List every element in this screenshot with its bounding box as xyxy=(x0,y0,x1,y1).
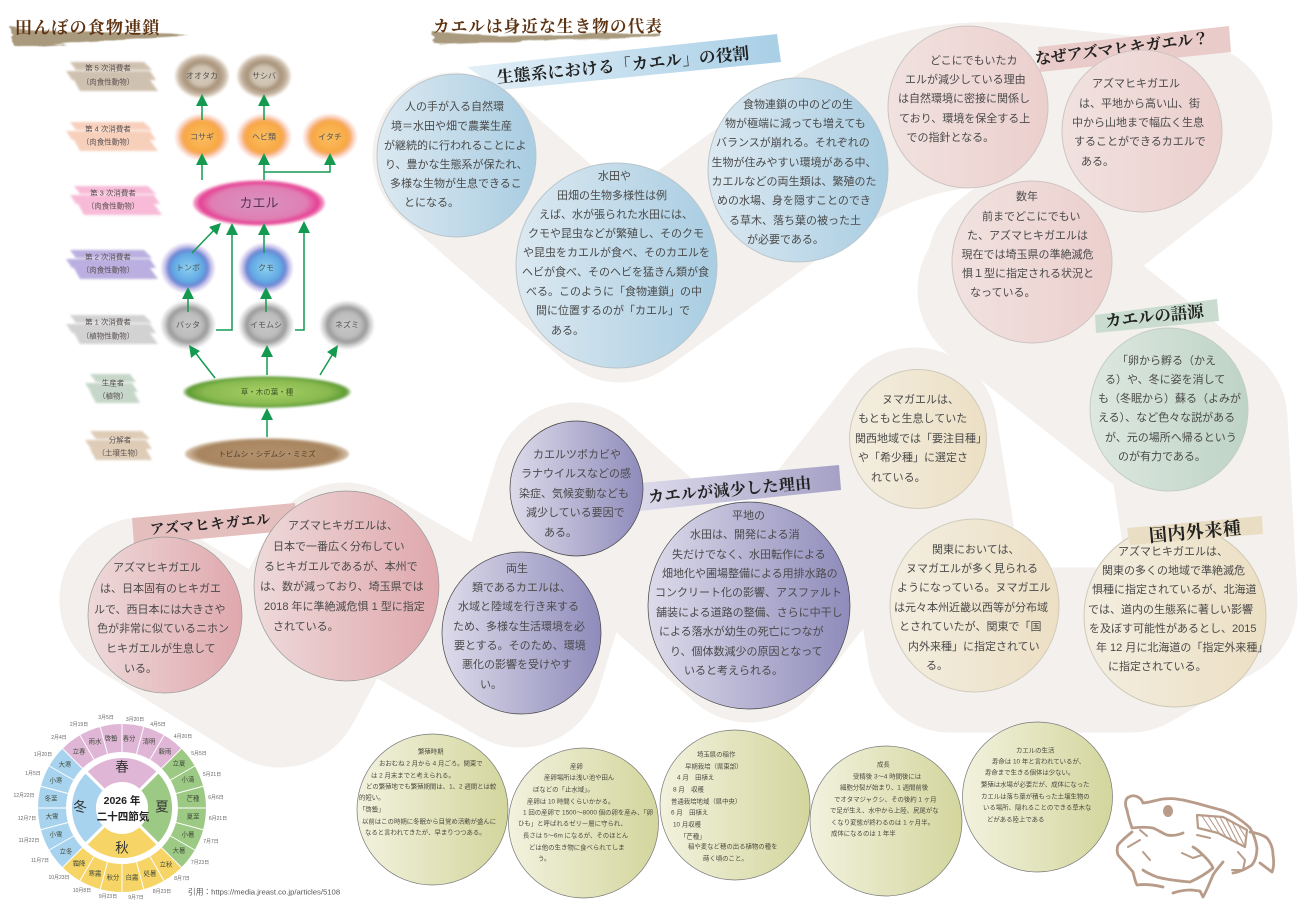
circle: growth: くなり変態が終わるのは 1 ヶ月半。 xyxy=(831,818,934,826)
circle: breeding season: どの繁殖地でも繁殖期間は、1、2 週間とは較 xyxy=(366,782,497,790)
circle: widely distributed habitat: アズマヒキガエル xyxy=(1092,76,1180,90)
circle: rice paddy biodiversity: 間に位置するのが「カエル」で xyxy=(536,303,690,317)
row label: producer: （植物） xyxy=(98,390,128,400)
food chain diagram xyxy=(66,54,374,470)
solar term dates: 9月7日 xyxy=(128,895,144,901)
circle: growth: 細胞分裂が始まり、1 週間前後 xyxy=(840,782,929,792)
circle: azuma hikigaeru in hokkaido: に指定されている。 xyxy=(1108,659,1207,673)
circle: why frogs are declining: は自然環境に密接に関係し xyxy=(898,91,1030,105)
circle: growth: 成長 xyxy=(877,760,890,768)
seasonal calendar: 24 solar terms xyxy=(13,715,227,901)
circle: most widely distributed xyxy=(254,491,439,681)
circle: growth: で足が生え、水中から上陸、尻尾がな xyxy=(830,806,939,814)
season labels: 夏 xyxy=(155,800,169,814)
circle: rice paddy biodiversity: 田畑の生物多様性は例 xyxy=(557,188,667,202)
circle: breeding season: なると言われてきたが、早まりつつある。 xyxy=(365,828,486,836)
circle: rice farming in saitama: 蒔く頃のこと。 xyxy=(703,854,748,862)
solar term names: 小寒 xyxy=(50,776,63,784)
solar term dates: 8月23日 xyxy=(153,889,171,895)
circle: paddy field changes: コンクリート化の影響、アスファルト xyxy=(655,585,842,599)
row label: decomposer: （土壌生物） xyxy=(98,448,142,458)
solar term dates: 6月6日 xyxy=(208,795,224,801)
solar term names: 立夏 xyxy=(173,758,186,768)
row label: decomposer: 分解者 xyxy=(109,434,132,444)
solar term names: 大雪 xyxy=(46,812,58,820)
circle: most widely distributed: アズマヒキガエルは、 xyxy=(288,518,398,532)
solar term names: 霜降 xyxy=(73,858,86,868)
circle: endemic to japan: ヒキガエルが生息して xyxy=(106,641,216,655)
solar term names: 冬至 xyxy=(45,794,58,802)
solar term names: 春分 xyxy=(123,734,136,742)
solar term dates: 1月5日 xyxy=(25,771,41,777)
solar term dates xyxy=(13,715,227,901)
circle: spawning: う。 xyxy=(538,854,550,862)
solar term names: 清明 xyxy=(143,736,155,746)
node: egret xyxy=(175,114,229,160)
circle: etymology of kaeru xyxy=(1090,328,1248,491)
circle: amphibian habitat: い。 xyxy=(480,679,502,691)
circle: breeding season: 以前はこの時期に冬眠から目覚め活動が盛んに xyxy=(362,816,496,826)
circle: human managed environment: 境＝水田や畑で農業生産 xyxy=(391,118,512,132)
circle: numagaeru in kanto: は元々本州近畿以西等が分布域 xyxy=(894,600,1048,614)
banner: etymology: カエルの語源 xyxy=(1104,298,1206,332)
banner: domestic alien species xyxy=(1127,514,1263,548)
circle: frog life: 寿命は 10 年と言われているが、 xyxy=(992,756,1085,766)
background: flowing beige band xyxy=(142,105,1215,685)
solar term names: 立冬 xyxy=(60,846,73,856)
circle: food chain balance: めの水場、身を隠すことのでき xyxy=(717,193,871,207)
node: sashiba: サシバ xyxy=(252,72,276,80)
circle: endemic to japan xyxy=(88,537,242,693)
season labels: 秋 xyxy=(115,840,129,856)
node: egret: コサギ xyxy=(190,132,214,142)
row label: producer xyxy=(85,374,140,403)
solar term names: 大暑 xyxy=(173,846,185,854)
circle: disease causes: 減少している要因で xyxy=(526,505,625,519)
circle: paddy field changes: 水田は、開発による消 xyxy=(690,527,800,541)
circle: spawning: ひも」と呼ばれるゼリー層に守られ、 xyxy=(518,818,627,828)
circle: disease causes: 染症、気候変動なども xyxy=(519,486,629,500)
circle: disease causes: ある。 xyxy=(544,526,577,539)
node: dragonfly: トンボ xyxy=(176,264,200,272)
banner: role of frogs: 生態系における「カエル」の役割 xyxy=(496,40,750,88)
inner ring gaps xyxy=(87,773,157,843)
circle: why frogs are declining: エルが減少している理由 xyxy=(905,72,1026,86)
circle: most widely distributed: るヒキガエルであるが、本州で xyxy=(264,559,418,573)
circle: saitama endangered status: 惧１型に指定される状況と xyxy=(962,266,1094,280)
circle: numagaeru in kansai: や「希少種」に選定さ xyxy=(858,450,968,464)
row label: fifth consumer: 第 5 次消費者 xyxy=(85,62,131,72)
circle: frog life: カエルの生活 xyxy=(1016,746,1055,754)
circle: why frogs are declining: ており、環境を保全する上 xyxy=(899,111,1030,125)
circle: human managed environment: 人の手が入る自然環 xyxy=(405,99,504,113)
circle: spawning xyxy=(508,748,658,898)
circle: rice farming in saitama: 10 月収穫 xyxy=(673,820,702,828)
solar term names: 寒露 xyxy=(89,868,102,878)
circle: food chain balance: 生物が住みやすい環境がある中、 xyxy=(712,155,876,169)
circle: amphibian habitat: 両生 xyxy=(506,561,528,575)
circle: numagaeru in kanto: 関東においては、 xyxy=(932,543,1019,556)
circle: saitama endangered status: 前までどこにでもい xyxy=(982,209,1080,223)
circle: numagaeru in kansai: れている。 xyxy=(871,471,926,484)
row label: first consumer: 第 1 次消費者 xyxy=(85,316,131,326)
season labels: 冬 xyxy=(73,800,87,814)
row label: fifth consumer: （肉食性動物） xyxy=(82,76,134,86)
circle: amphibian habitat: ため、多様な生活環境を必 xyxy=(453,619,585,633)
circle: food chain balance: カエルなどの両生類は、繁殖のた xyxy=(712,174,876,188)
circle: widely distributed habitat: することができるカエルで xyxy=(1074,134,1206,148)
row label: producer: 生産者 xyxy=(102,378,125,388)
circle: frog life: いる場所、隠れることのできる草木な xyxy=(983,802,1091,812)
node: caterpillar xyxy=(239,301,293,349)
node: mouse xyxy=(320,301,374,349)
row label: decomposer xyxy=(85,431,152,460)
circle: why frogs are declining: での指針となる。 xyxy=(906,130,994,144)
circle: widely distributed habitat: は、平地から高い山、街 xyxy=(1079,96,1200,110)
circle: most widely distributed: 2018 年に準絶滅危惧 1 型に指定 xyxy=(264,599,425,613)
circle: numagaeru in kanto: とされていたが、関東で「国 xyxy=(899,619,1041,633)
circle: azuma hikigaeru in hokkaido: では、道内の生態系に著しい影響 xyxy=(1088,602,1253,616)
circle: etymology of kaeru: 「卵から孵る（かえ xyxy=(1117,353,1216,367)
circle: paddy field changes: 舗装による道路の整備、さらに中干し xyxy=(656,605,843,619)
circle: amphibian habitat: 要とする。そのため、環境 xyxy=(454,639,586,652)
circle: rice farming in saitama xyxy=(660,730,810,880)
circle: breeding season: は 2 月末までと考えられる。 xyxy=(371,770,455,780)
circle: disease causes: ラナウイルスなどの感 xyxy=(521,466,631,480)
solar term dates: 3月5日 xyxy=(98,715,114,721)
circle: rice paddy biodiversity: ある。 xyxy=(551,324,584,337)
node: spider xyxy=(239,243,293,293)
solar term dates: 12月7日 xyxy=(18,816,36,822)
circle: numagaeru in kansai: ヌマガエルは、 xyxy=(882,393,959,406)
circle: paddy field changes: 畑地化や圃場整備による用排水路の xyxy=(662,566,838,580)
circle: saitama endangered status: た、アズマヒキガエルは xyxy=(967,228,1088,242)
circle: spawning: 産卵 xyxy=(570,762,583,770)
circle: most widely distributed: 日本で一番広く分布してい xyxy=(273,539,405,553)
solar term names: 処暑 xyxy=(144,868,156,878)
circle: breeding season: 繁殖時期 xyxy=(418,746,444,756)
circle: etymology of kaeru: が、元の場所へ帰るという xyxy=(1105,430,1237,444)
heading: azuma hikigaeru: アズマヒキガエル xyxy=(149,508,272,539)
node: snakes xyxy=(237,114,291,160)
circle: numagaeru in kanto: る。 xyxy=(926,660,948,672)
row label: first consumer xyxy=(66,315,158,344)
circle: food chain balance: 物が極端に減っても増えても xyxy=(725,116,866,130)
circle: growth: 受精後 3〜4 時間後には xyxy=(853,772,922,780)
banner: azuma hikigaeru xyxy=(132,503,297,545)
solar term dates: 5月5日 xyxy=(191,751,207,757)
title: food chain: 田んぼの食物連鎖 xyxy=(15,14,161,38)
circle: widely distributed habitat: ある。 xyxy=(1081,155,1114,168)
circle: spawning: 1 回の産卵で 1500〜8000 個の卵を産み、「卵 xyxy=(523,808,653,816)
circle: paddy field changes xyxy=(648,502,850,709)
circle: saitama endangered status: 現在では埼玉県の準絶滅危 xyxy=(962,247,1094,261)
circle: rice paddy biodiversity xyxy=(516,163,717,368)
banner: role of frogs xyxy=(467,34,781,90)
solar term dates: 4月5日 xyxy=(150,722,166,728)
node: soil organisms xyxy=(185,438,349,470)
circle: rice farming in saitama: 6 月 田植え xyxy=(671,808,708,816)
circle: rice paddy biodiversity: えば、水が張られた水田には、 xyxy=(539,207,693,221)
row label: fourth consumer: （肉食性動物） xyxy=(82,136,134,146)
solar term dates: 10月23日 xyxy=(48,875,70,881)
circle: breeding season xyxy=(357,734,508,885)
circle: spawning: どは他の生き物に食べられてしま xyxy=(529,842,625,852)
node: grasshopper: バッタ xyxy=(176,320,200,330)
circle: amphibian habitat xyxy=(442,552,601,714)
circle: food chain balance: が必要である。 xyxy=(747,232,824,246)
circle: rice farming in saitama: 8 月 収穫 xyxy=(673,784,705,794)
circle: numagaeru in kanto: ようになっている。ヌマガエル xyxy=(897,581,1050,594)
circle: saitama endangered status xyxy=(952,181,1112,343)
circle: human managed environment xyxy=(377,74,536,237)
outer ring xyxy=(52,738,192,878)
circle: numagaeru in kanto: 内外来種」に指定されてい xyxy=(908,639,1040,653)
circle: rice farming in saitama: 4 月 田植え xyxy=(677,772,714,782)
calendar centre label: 2026 年 xyxy=(104,794,141,807)
circle: etymology of kaeru: える）、など色々な説がある xyxy=(1098,410,1235,424)
banner: reasons for decline xyxy=(640,465,841,511)
circle: endemic to japan: は、日本固有のヒキガエ xyxy=(100,581,221,595)
title: food chain xyxy=(10,14,190,47)
solar term names: 夏至 xyxy=(187,812,200,820)
circle: paddy field changes: による落水が幼生の死亡につなが xyxy=(659,624,824,638)
solar term dates: 11月22日 xyxy=(19,838,39,844)
circle: disease causes: カエルツボカビや xyxy=(533,448,621,461)
node: weasel xyxy=(303,114,357,160)
inner season ring xyxy=(84,770,160,846)
node: goshawk: オオタカ xyxy=(186,72,218,80)
circle: food chain balance: る草木、落ち葉の被った土 xyxy=(729,213,861,227)
solar term dates: 8月7日 xyxy=(174,876,190,882)
icon: toad line drawing xyxy=(1117,796,1274,897)
circle: growth: 成体になるのは 1 年半 xyxy=(831,828,896,838)
season labels xyxy=(73,760,169,856)
solar term dates: 1月20日 xyxy=(34,752,52,758)
node: soil organisms: トビムシ・シデムシ・ミミズ xyxy=(218,448,316,458)
solar term names: 小雪 xyxy=(50,830,62,838)
circle: rice paddy biodiversity: や昆虫をカエルが食べ、そのカエルを xyxy=(523,245,710,259)
circle: amphibian habitat: 悪化の影響を受けやす xyxy=(462,657,572,671)
circle: paddy field changes: 平地の xyxy=(732,509,765,522)
circle: azuma hikigaeru in hokkaido: アズマヒキガエルは、 xyxy=(1118,544,1228,558)
circle: saitama endangered status: なっている。 xyxy=(970,286,1035,299)
circle: numagaeru in kanto: ヌマガエルが多く見られる xyxy=(906,561,1038,575)
circle: etymology of kaeru: る）や、冬に姿を消して xyxy=(1105,372,1225,386)
circle: rice farming in saitama: 「芒種」 xyxy=(680,832,706,840)
circle: etymology of kaeru: も（冬眠から）蘇る（よみが xyxy=(1098,391,1241,405)
circle: rice paddy biodiversity: クモや昆虫などが繁殖し、そのクモ xyxy=(528,226,704,240)
row label: fifth consumer xyxy=(66,62,158,91)
circle: frog life: カエルは落ち葉が積もった土壌生物の xyxy=(981,792,1090,800)
solar term dates: 11月7日 xyxy=(31,858,49,864)
row label: fourth consumer: 第 4 次消費者 xyxy=(85,124,131,134)
circle: spawning: 産卵場所は浅い池や田ん xyxy=(544,772,615,782)
solar term names: 立秋 xyxy=(160,860,173,868)
circle: numagaeru in kansai xyxy=(850,370,987,508)
circle: breeding season: 「啓蟄」 xyxy=(359,804,385,814)
circle: numagaeru in kansai: もともと生息していた xyxy=(858,411,967,425)
circle: rice paddy biodiversity: 水田や xyxy=(598,170,631,183)
solar term names: 小暑 xyxy=(182,830,194,838)
circle: food chain balance: 食物連鎖の中のどの生 xyxy=(743,97,853,111)
node: snakes: ヘビ類 xyxy=(252,132,276,142)
solar term dates: 9月23日 xyxy=(99,894,117,900)
circle: amphibian habitat: 水域と陸域を行き来する xyxy=(458,600,579,613)
circle: rice farming in saitama: 埼玉県の稲作 xyxy=(697,750,736,758)
circle: human managed environment: とになる。 xyxy=(404,196,459,209)
circle: azuma hikigaeru in hokkaido: を及ぼす可能性があるとし、2015 xyxy=(1089,621,1256,635)
solar term names: 芒種 xyxy=(187,794,200,802)
circle: spawning: ぼなどの「止水域」。 xyxy=(533,784,594,794)
arrows xyxy=(182,94,338,437)
circle: most widely distributed: は、数が減っており、埼玉県では xyxy=(260,579,424,593)
circle: frog life xyxy=(962,722,1112,872)
circle: paddy field changes: いると考えられる。 xyxy=(684,664,783,677)
node: grasshopper xyxy=(161,301,215,349)
node: weasel: イタチ xyxy=(318,132,342,142)
circle: azuma hikigaeru in hokkaido: 年 12 月に北海道の「指定外来種」 xyxy=(1096,640,1268,654)
calendar centre label: 二十四節気 xyxy=(97,810,150,823)
circle: azuma hikigaeru in hokkaido: 惧種に指定されているが、北海道 xyxy=(1092,582,1256,596)
solar term dates: 12月22日 xyxy=(13,793,35,799)
row label: first consumer: （植物性動物） xyxy=(82,330,134,340)
circle: why frogs are declining xyxy=(888,26,1048,188)
solar term dates: 5月21日 xyxy=(203,772,221,778)
circle: growth xyxy=(810,746,962,896)
solar term names: 小満 xyxy=(182,774,195,784)
node: goshawk xyxy=(175,54,229,98)
circle: food chain balance xyxy=(708,78,888,262)
circle: most widely distributed: されている。 xyxy=(273,620,339,633)
node: mouse: ネズミ xyxy=(335,320,359,330)
row label: fourth consumer xyxy=(66,122,158,151)
citation: 引用：https://media.jreast.co.jp/articles/5108 xyxy=(188,888,340,896)
circle: saitama endangered status: 数年 xyxy=(1016,189,1038,203)
circle: human managed environment: り、豊かな生態系が保たれ、 xyxy=(385,157,528,171)
node: caterpillar: イモムシ xyxy=(250,320,282,330)
season labels: 春 xyxy=(115,760,129,774)
solar term names: 穀雨 xyxy=(159,746,172,756)
circle: rice farming in saitama: 普通栽培地域（県中央） xyxy=(671,796,741,806)
solar term names: 啓蟄 xyxy=(105,734,118,742)
circle: rice paddy biodiversity: べる。このように「食物連鎖」の中 xyxy=(526,284,702,298)
row label: third consumer xyxy=(70,186,162,215)
solar term dates: 7月7日 xyxy=(203,839,219,845)
node: frog: カエル xyxy=(239,196,279,210)
circle: rice paddy biodiversity: ヘビが食べ、そのヘビを猛きん類が食 xyxy=(522,265,709,279)
circle: rice farming in saitama: 稲や麦など穂の出る植物の種を xyxy=(688,842,777,850)
calendar centre label xyxy=(97,794,150,823)
circle: numagaeru in kansai: 関西地域では「要注目種」 xyxy=(855,431,987,445)
circle: why frogs are declining: どこにでもいたカ xyxy=(930,54,1017,67)
circle: endemic to japan: いる。 xyxy=(124,663,157,675)
circle: numagaeru in kanto xyxy=(890,519,1059,692)
circle: spawning: 長さは 5〜6m になるが、そのほとん xyxy=(523,830,629,840)
circle: food chain balance: バランスが崩れる。それぞれの xyxy=(716,135,870,149)
node: dragonfly xyxy=(161,243,215,293)
circle: widely distributed habitat xyxy=(1062,50,1222,212)
node: frog xyxy=(193,180,325,226)
solar term names: 雨水 xyxy=(89,736,102,746)
solar term names: 秋分 xyxy=(107,872,120,882)
banner: why azuma hikigaeru: なぜアズマヒキガエル？ xyxy=(1034,25,1210,69)
circle: widely distributed habitat: 中から山地まで幅広く生息 xyxy=(1072,115,1204,129)
circle: amphibian habitat: 類であるカエルは、 xyxy=(472,581,571,594)
solar term dates: 4月20日 xyxy=(174,734,192,740)
banner: reasons for decline: カエルが減少した理由 xyxy=(647,470,812,507)
solar term names: 白露 xyxy=(126,872,139,882)
node: plants xyxy=(183,376,351,408)
circle: endemic to japan: ルで、西日本には大きさや xyxy=(94,602,226,616)
row label: second consumer: （肉食性動物） xyxy=(82,264,134,274)
node: plants: 草・木の葉・種 xyxy=(241,386,294,396)
banner: domestic alien species: 国内外来種 xyxy=(1148,514,1242,548)
circle: azuma hikigaeru in hokkaido: 関東の多くの地域で準絶滅危 xyxy=(1102,563,1245,577)
solar term dates: 10月8日 xyxy=(73,888,91,894)
circle: spawning: 産卵は 10 時間くらいかかる。 xyxy=(527,796,614,806)
circle: paddy field changes: り、個体数減少の原因となって xyxy=(670,644,823,658)
node: spider: クモ xyxy=(258,264,274,272)
circle: growth: でオタマジャクシ、その後約 1 ヶ月 xyxy=(834,794,937,804)
ring dividers xyxy=(38,724,206,892)
row label: third consumer: （肉食性動物） xyxy=(87,200,139,210)
circle: azuma hikigaeru in hokkaido xyxy=(1084,525,1268,707)
circle: endemic to japan: 色が非常に似ているニホン xyxy=(97,621,229,635)
row label: second consumer: 第 2 次消費者 xyxy=(85,252,131,262)
circle: rice farming in saitama: 早期栽培（県東部） xyxy=(685,762,743,770)
circle: human managed environment: が継続的に行われることによ xyxy=(384,138,526,152)
node: sashiba xyxy=(237,54,291,98)
row label: second consumer xyxy=(66,250,158,279)
solar term dates: 7月23日 xyxy=(191,860,209,866)
title: frogs as familiar creatures: カエルは身近な生き物の代表 xyxy=(433,13,663,37)
solar term names: 大寒 xyxy=(59,760,72,768)
solar term dates: 2月4日 xyxy=(51,735,67,741)
solar term names: 立春 xyxy=(73,746,86,756)
circle: frog life: 寿命まで生きる個体は少ない。 xyxy=(985,768,1074,776)
solar term names xyxy=(45,734,200,882)
circle: endemic to japan: アズマヒキガエル xyxy=(113,560,201,574)
solar term dates: 6月21日 xyxy=(209,816,227,822)
circle: breeding season: 的短い。 xyxy=(359,792,385,802)
circle: paddy field changes: 失だけでなく、水田転作による xyxy=(672,548,826,561)
circle: frog life: 繁殖は水場が必要だが、成体になった xyxy=(981,780,1090,788)
solar term dates: 3月20日 xyxy=(126,717,144,723)
circle: frog life: どがある陸上である xyxy=(987,814,1044,824)
circle: etymology of kaeru: のが有力である。 xyxy=(1118,449,1206,463)
circle: human managed environment: 多様な生物が生息できるこ xyxy=(390,176,522,190)
circle: disease causes xyxy=(510,421,643,556)
circle: breeding season: おおむね 2 月から 4 月ごろ。関東で xyxy=(379,758,483,768)
row label: third consumer: 第 3 次消費者 xyxy=(90,188,136,198)
solar term dates: 2月19日 xyxy=(70,722,88,728)
